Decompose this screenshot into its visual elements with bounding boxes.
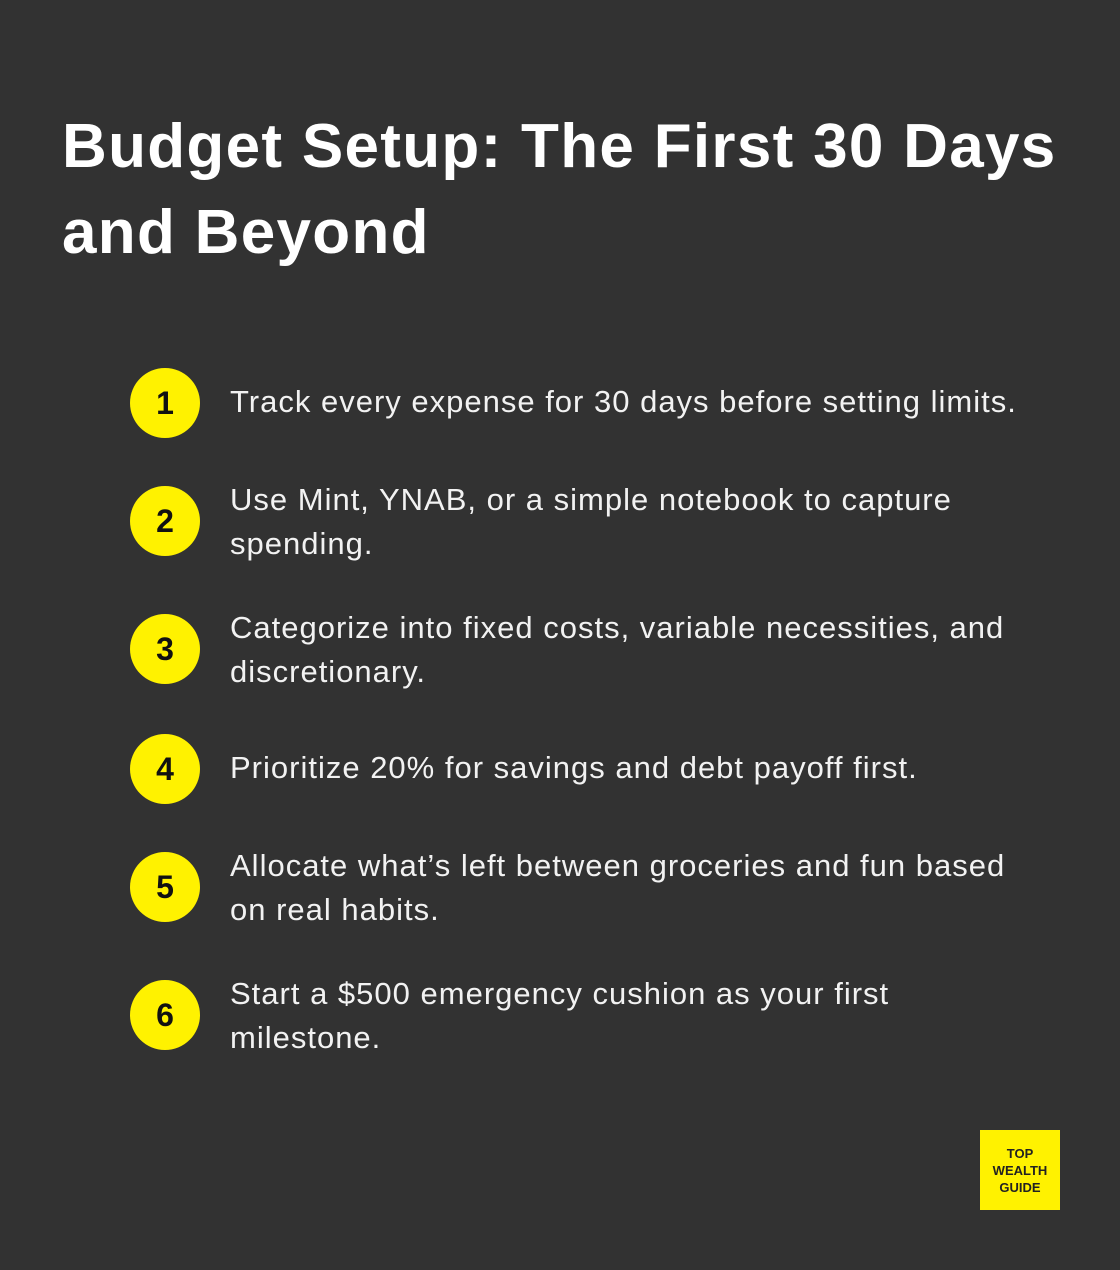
text 3: Categorize into fixed costs, variable necessities, and — [230, 610, 1004, 645]
text 4: Prioritize 20% for savings and debt payoff first. — [230, 750, 918, 785]
number 5 — [130, 852, 200, 922]
title — [62, 112, 1057, 267]
text 3: discretionary. — [230, 654, 426, 689]
text 2 — [230, 482, 952, 561]
step 1 — [130, 368, 1017, 438]
logo: GUIDE — [999, 1180, 1041, 1195]
title: and Beyond — [62, 198, 430, 267]
step 4 — [130, 734, 918, 804]
number 6 — [130, 980, 200, 1050]
number 6: 6 — [156, 997, 174, 1033]
step 6 — [130, 976, 889, 1055]
step 5 — [130, 848, 1005, 927]
text 6: milestone. — [230, 1020, 381, 1055]
text 2: Use Mint, YNAB, or a simple notebook to capture — [230, 482, 952, 517]
text 6 — [230, 976, 889, 1055]
number 1 — [130, 368, 200, 438]
number 4 — [130, 734, 200, 804]
title: Budget Setup: The First 30 Days — [62, 112, 1057, 181]
text 5: on real habits. — [230, 892, 440, 927]
text 2: spending. — [230, 526, 373, 561]
number 2: 2 — [156, 503, 174, 539]
text 1: Track every expense for 30 days before setting limits. — [230, 384, 1017, 419]
step 3 — [130, 610, 1004, 689]
text 5 — [230, 848, 1005, 927]
number 3 — [130, 614, 200, 684]
text 6: Start a $500 emergency cushion as your first — [230, 976, 889, 1011]
logo: TOP — [1007, 1146, 1033, 1161]
text 5: Allocate what’s left between groceries and fun based — [230, 848, 1005, 883]
number 2 — [130, 486, 200, 556]
logo — [980, 1130, 1060, 1210]
text 3 — [230, 610, 1004, 689]
number 5: 5 — [156, 869, 174, 905]
number 3: 3 — [156, 631, 174, 667]
step 2 — [130, 482, 952, 561]
number 4: 4 — [156, 751, 174, 787]
logo: WEALTH — [993, 1163, 1047, 1178]
number 1: 1 — [156, 385, 174, 421]
